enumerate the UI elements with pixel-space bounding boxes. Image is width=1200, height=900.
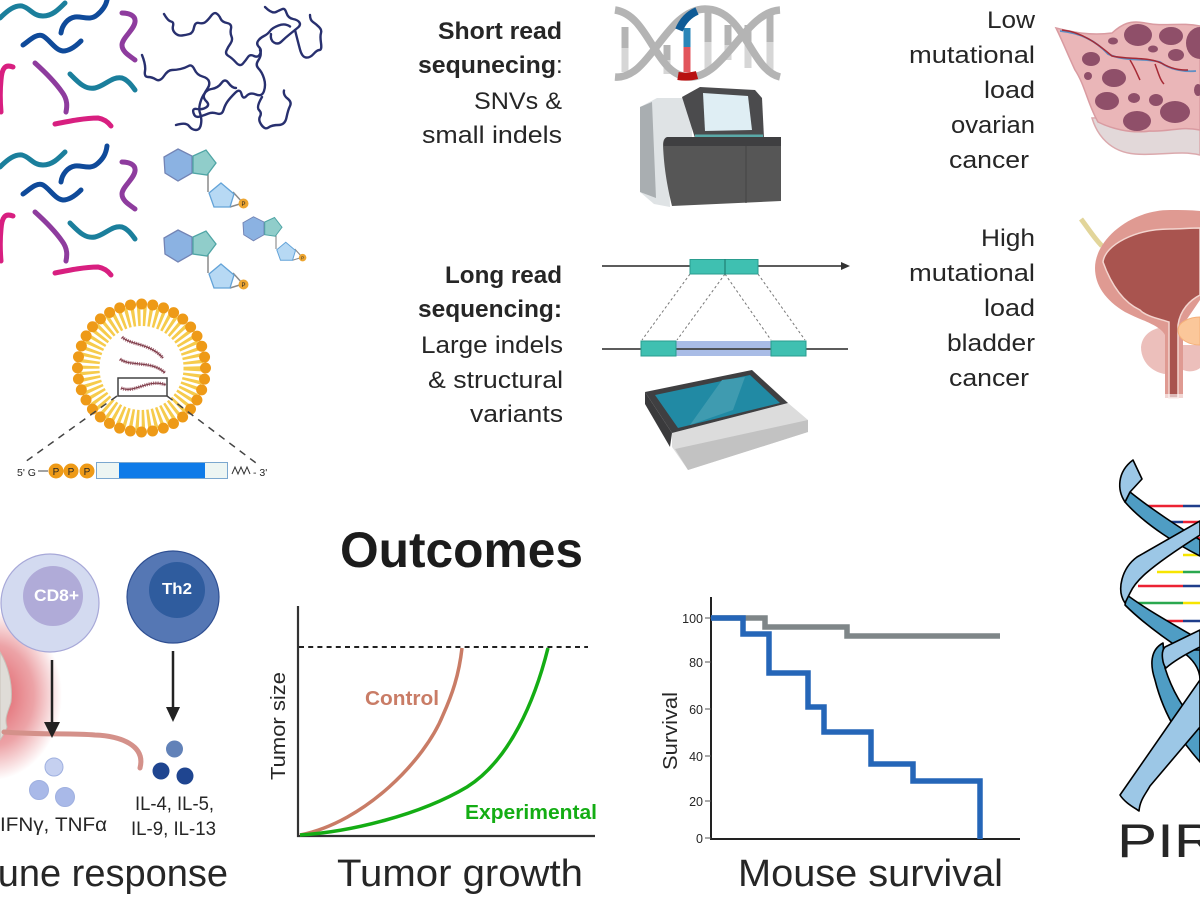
icon: RNA strands lower [0,146,135,275]
text: high mutational load bladder cancer: mutational [909,260,1035,287]
text: low mutational load ovarian cancer: load [984,77,1035,104]
heading: tumor growth: Tumor growth [337,853,583,895]
heading: mouse survival: Mouse survival [738,853,1003,895]
chart: mouse survival: 100 [682,612,703,626]
heading: outcomes: Outcomes [340,522,583,578]
text: low mutational load ovarian cancer: ovarian [951,112,1035,139]
mRNA construct diagram [17,462,267,479]
text: long read sequencing: variants [470,401,563,428]
text: long read sequencing: Long read [445,262,562,289]
text: low mutational load ovarian cancer: mutational [909,42,1035,69]
icon: nucleotide 1: P [241,202,246,208]
text: short read sequencing [418,18,563,149]
mRNA construct diagram: P [68,467,75,478]
icon: nucleotide 3 [243,217,306,261]
icon: RNA strands upper [0,0,135,126]
mRNA construct diagram: P [84,467,91,478]
text: high mutational load bladder cancer: load [984,295,1035,322]
text: long read sequencing: Large indels [421,332,563,359]
chart: mouse survival: 80 [689,656,703,670]
series label: experimental: Experimental [465,802,597,824]
text: low mutational load ovarian cancer [909,7,1036,174]
mRNA construct diagram: 5' G [17,467,36,479]
icon: CD8+ T cell [1,554,99,652]
axis label: survival: Survival [660,692,682,770]
chart: mouse survival: 40 [689,750,703,764]
icon: nucleotide 2 [164,230,248,290]
icon: PIR logo DNA ribbons [1120,460,1200,811]
text: interleukins: IL-4, IL-5, [135,794,214,815]
text: interleukins: IL-9, IL-13 [131,819,216,840]
icon: tangled DNA strand [142,7,321,130]
icon: nucleotide 1 [164,149,248,208]
text: high mutational load bladder cancer: High [981,225,1035,252]
chart: mouse survival: 20 [689,795,703,809]
text: long read sequencing: & structural [428,367,563,394]
text: high mutational load bladder cancer [909,225,1035,392]
icon: CD8+ T cell: CD8+ [34,587,79,605]
text: short read sequencing: small indels [422,122,562,149]
arrow: Th2 to cytokines [166,651,180,722]
icon: CD8 cytokines [30,758,74,806]
chart: mouse survival [660,597,1020,846]
icon: short read sequencer [640,87,781,207]
icon: nucleotide 3: P [301,256,304,261]
text: short read sequencing: Short read [438,18,562,45]
text: IFN gamma and TNF alpha: IFNγ, TNFα [0,815,107,836]
text: short read sequencing: sequnecing [418,52,556,79]
icon: Th2 cell [127,551,219,643]
icon: DNA with highlighted base pair [615,9,780,77]
icon: Th2 cell: Th2 [162,581,192,598]
icon: inflamed tumor region on mouse [0,610,141,780]
text: long read sequencing: sequencing: [418,296,562,323]
icon: long read sequencer [645,370,808,470]
chart: tumor growth [268,606,597,836]
text: interleukins [131,794,216,840]
text: low mutational load ovarian cancer: cancer [949,147,1029,174]
icon: ovary [1056,22,1200,155]
text: high mutational load bladder cancer: bladder [947,330,1035,357]
mRNA construct diagram: - 3' [253,467,267,479]
text: short read sequencing: SNVs & [474,88,562,115]
diagram: structural variant insertion [602,259,850,356]
series label: control: Control [365,688,439,710]
icon: bladder [1081,210,1200,404]
text: long read sequencing [418,262,563,428]
mRNA construct diagram: P [53,467,60,478]
text: low mutational load ovarian cancer: Low [987,7,1036,34]
axis label: tumor size: Tumor size [268,672,290,780]
arrow: CD8+ to cytokines [44,660,60,738]
icon: Th2 cytokines [152,740,194,784]
icon: nucleotide 2: P [241,283,246,289]
chart: mouse survival: 60 [689,703,703,717]
chart: mouse survival: 0 [696,832,703,846]
text: high mutational load bladder cancer: cancer [949,365,1029,392]
text: short read sequencing: : [556,52,563,79]
icon: lipid nanoparticle with mRNA [25,304,256,463]
